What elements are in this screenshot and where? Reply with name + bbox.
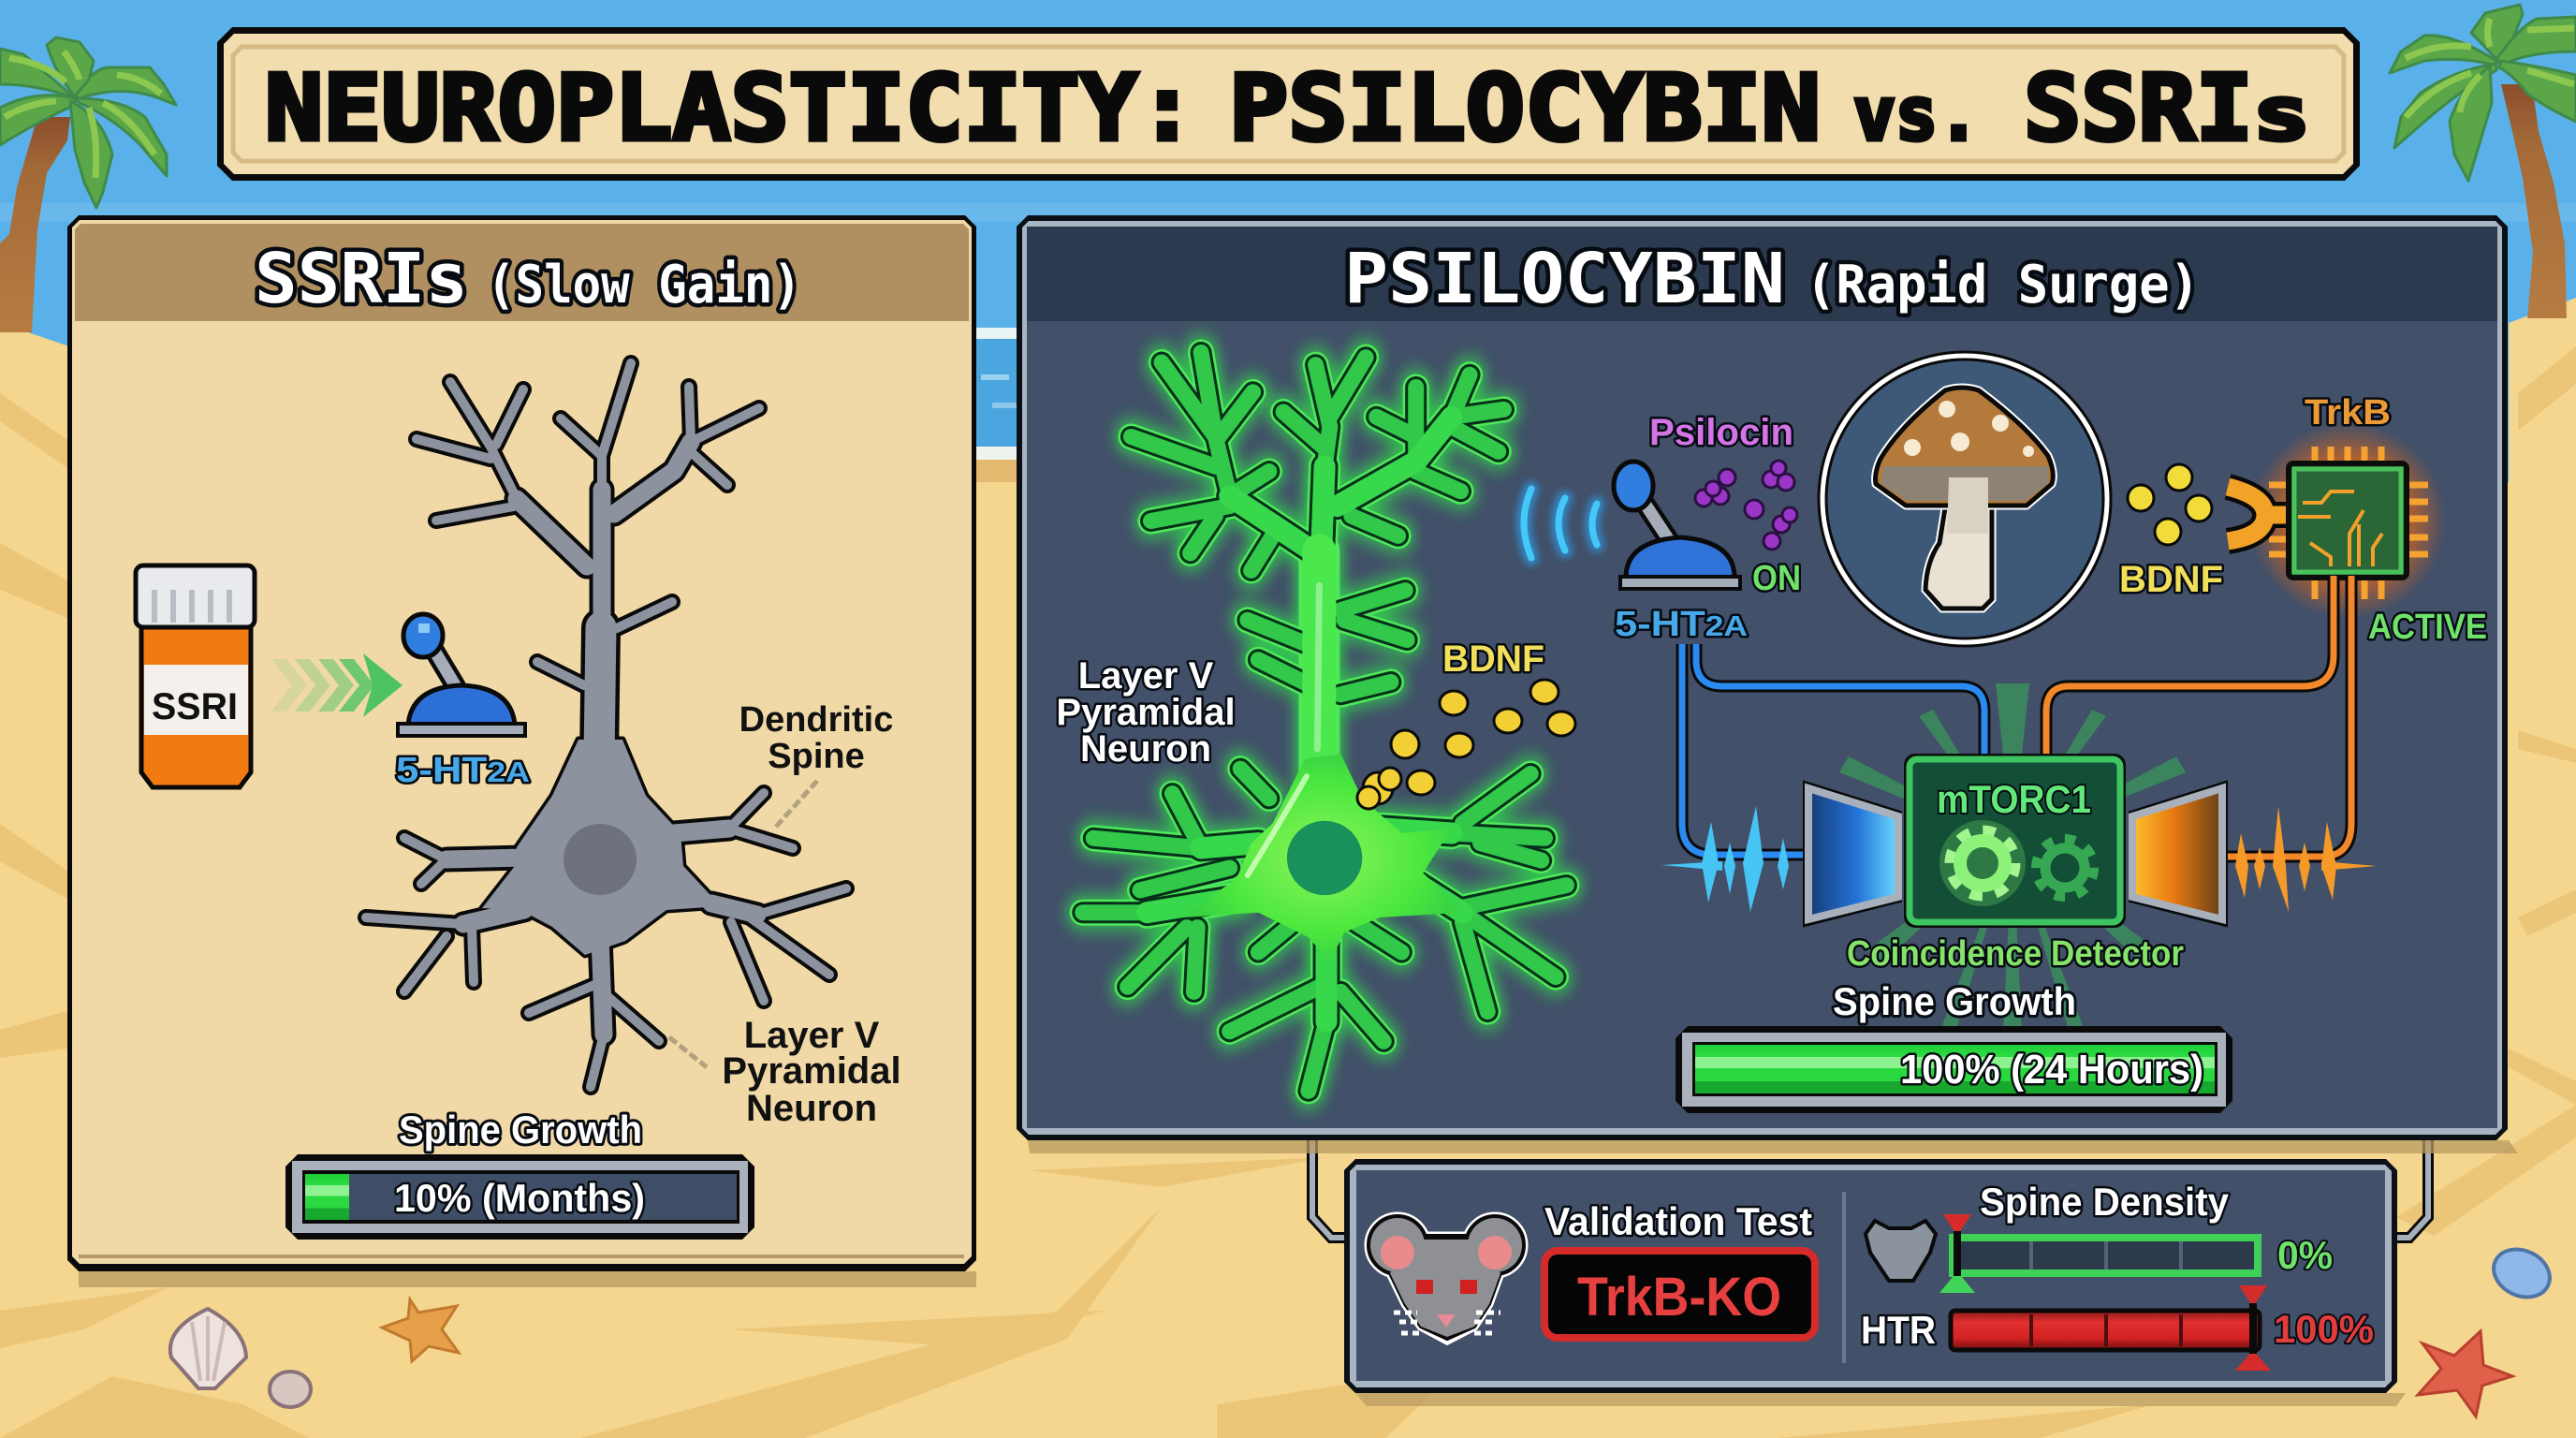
label: ACTIVE: ACTIVE	[2368, 608, 2487, 647]
icon: 5-HT2A lever on	[1614, 462, 1740, 589]
panel: validation test	[1344, 1159, 2406, 1406]
icon: bright gear	[1939, 820, 2026, 906]
icon: SSRI pill bottle	[136, 565, 255, 787]
funnel: orange frame	[2132, 788, 2222, 919]
icon: small mouse	[1866, 1221, 1936, 1281]
title banner: s	[2253, 73, 2310, 157]
signal: blue spikes	[1661, 806, 1789, 912]
signal: orange spikes	[2235, 806, 2377, 912]
progress bar: 10% (Months): 10% (Months)	[394, 1176, 645, 1220]
label: Dendritic Spine	[739, 700, 893, 776]
label: Layer V Pyramidal Neuron: Neuron	[1080, 728, 1211, 770]
funnel: orange input	[2130, 783, 2226, 925]
icon: TrkB receptor chip	[2228, 422, 2446, 619]
label: Spine Growth: Spine Growth	[399, 1108, 642, 1152]
label: TrkB: TrkB	[2305, 393, 2391, 433]
arrow: green chevrons	[271, 653, 402, 717]
label: Validation Test: Validation Test	[1544, 1199, 1812, 1243]
title banner: PSILOCYBIN	[1229, 55, 1821, 161]
label: Dendritic Spine: Dendritic	[739, 700, 893, 740]
leader: dendritic spine	[776, 781, 817, 827]
label: BDNF: BDNF	[2119, 559, 2223, 600]
label: Layer V Pyramidal Neuron: Layer V	[744, 1015, 880, 1056]
label: Layer V Pyramidal Neuron: Pyramidal	[1056, 692, 1236, 733]
label: Coincidence Detector: Coincidence Detector	[1847, 934, 2184, 974]
chart: HTR bar	[1951, 1285, 2374, 1371]
label: ON: ON	[1752, 559, 1801, 598]
neuron: glowing green pyramidal	[1083, 352, 1566, 1091]
heading: SSRIs (Slow Gain): SSRIs	[255, 239, 468, 319]
label: Layer V Pyramidal Neuron: Pyramidal	[722, 1050, 901, 1092]
label: Layer V Pyramidal Neuron	[722, 1015, 901, 1129]
BDNF dots near neuron	[1357, 680, 1575, 809]
progress bar: 100% (24 Hours): 100% (24 Hours)	[1900, 1047, 2203, 1093]
panel: SSRIs	[67, 215, 976, 1287]
psilocin molecules	[1695, 461, 1797, 550]
divider	[1842, 1192, 1846, 1363]
leader: pyramidal neuron	[669, 1037, 707, 1067]
rays behind mTORC1	[1839, 683, 2186, 1030]
progress bar: 100% (24 Hours)	[1676, 1026, 2232, 1113]
heading: PSILOCYBIN (Rapid Surge): (Rapid Surge)	[1806, 255, 2200, 315]
neuron: grey pyramidal	[366, 363, 846, 1087]
icon: red starfish	[2418, 1331, 2512, 1416]
label: Layer V Pyramidal Neuron: Neuron	[746, 1088, 877, 1129]
label: HTR: HTR	[1861, 1308, 1936, 1352]
right palm tree	[2390, 5, 2576, 318]
heading: SSRIs (Slow Gain): (Slow Gain)	[487, 255, 801, 315]
icon: TrkB-KO mouse	[1368, 1216, 1524, 1341]
funnel: blue input	[1805, 783, 1900, 925]
icon: pebble	[270, 1372, 311, 1407]
label: Layer V Pyramidal Neuron: Layer V	[1078, 655, 1214, 697]
icon: blue signal arcs	[1524, 489, 1597, 558]
chart: spine density bar	[1939, 1214, 2333, 1293]
heading: PSILOCYBIN (Rapid Surge): PSILOCYBIN	[1344, 239, 1785, 319]
icon: orange starfish	[382, 1299, 459, 1361]
label: 5-HT2A: 5-HT 2A	[1615, 605, 1748, 644]
wires: blue 5-HT2A path	[1682, 644, 1984, 855]
left palm tree	[0, 37, 176, 332]
icon: dim gear	[2037, 840, 2093, 896]
connector wires highlight	[1312, 1137, 2428, 1238]
icon: 5-HT2A lever	[398, 614, 525, 736]
icon: blue shell	[2486, 1240, 2557, 1306]
icon: SSRI pill bottle: SSRI	[152, 686, 238, 727]
mTORC1 detector: mTORC1	[1937, 777, 2091, 821]
wires: orange TrkB path	[2046, 576, 2351, 857]
label: Dendritic Spine: Spine	[768, 737, 865, 776]
chart: HTR bar: 100%	[2274, 1307, 2374, 1351]
icon: seashell	[170, 1309, 246, 1388]
icon: mushroom in circle	[1822, 356, 2107, 642]
panel: Psilocybin	[1017, 215, 2518, 1153]
connector wires to validation panel	[1312, 1137, 2428, 1238]
title banner	[217, 27, 2360, 181]
funnel: blue frame	[1808, 788, 1898, 919]
label: Spine Growth: Spine Growth	[1833, 979, 2076, 1023]
progress bar: 10% (Months)	[285, 1154, 754, 1240]
badge: TrkB-KO	[1544, 1251, 1815, 1338]
label: Spine Density: Spine Density	[1980, 1180, 2230, 1224]
label: BDNF at neuron: BDNF	[1442, 638, 1544, 680]
BDNF dots near receptor	[2128, 464, 2212, 545]
label: Psilocin: Psilocin	[1649, 412, 1793, 453]
chart: spine density bar: 0%	[2277, 1233, 2333, 1277]
title banner: NEUROPLASTICITY:	[265, 55, 1196, 161]
badge: TrkB-KO: TrkB-KO	[1577, 1267, 1781, 1328]
title banner: vs.	[1853, 73, 1980, 157]
title banner: SSRI	[2024, 55, 2253, 161]
label: 5-HT2A: 5-HT 2A	[396, 751, 530, 790]
label: Layer V Pyramidal Neuron	[1056, 655, 1236, 770]
mTORC1 detector	[1904, 754, 2126, 928]
